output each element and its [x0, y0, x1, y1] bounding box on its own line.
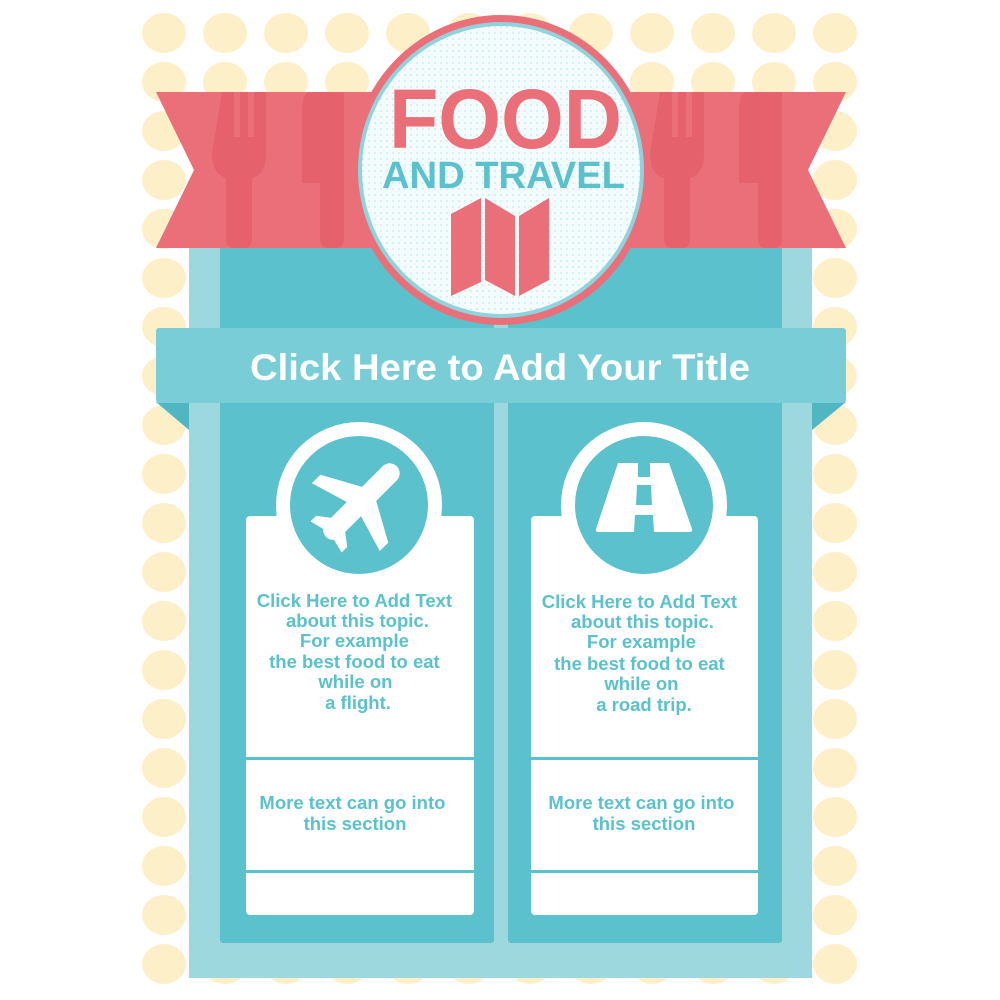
text block: For example — [587, 631, 696, 652]
icon: fork and knife left — [212, 92, 344, 248]
heading: FOOD: FOOD — [389, 72, 622, 166]
card: road trip — [531, 422, 758, 915]
emblem circle — [351, 15, 651, 325]
ribbon — [156, 92, 846, 248]
title band folds — [156, 402, 846, 430]
text block: while on — [603, 673, 678, 694]
text block: a flight. — [325, 692, 391, 713]
text block: more: this section — [593, 813, 695, 834]
text block: For example — [300, 630, 409, 651]
text block: about this topic. — [286, 610, 429, 631]
text block: more: More text can go into — [259, 792, 445, 813]
background panel — [189, 240, 812, 978]
text block: about this topic. — [571, 611, 714, 632]
text block: the best food to eat — [554, 653, 725, 674]
text block: the best food to eat — [269, 651, 440, 672]
text block: Click Here to Add Text — [257, 590, 452, 611]
text block: while on — [317, 671, 392, 692]
text block: more: More text can go into — [548, 792, 734, 813]
title band: Click Here to Add Your Title — [250, 347, 750, 388]
title band — [156, 328, 846, 403]
text block: Click Here to Add Text — [542, 591, 737, 612]
heading: AND TRAVEL: AND TRAVEL — [382, 155, 625, 197]
icon: map — [451, 198, 549, 296]
text block: a road trip. — [596, 694, 692, 715]
text block: more: this section — [304, 813, 406, 834]
icon: fork and knife right — [650, 92, 782, 248]
icon: airplane — [292, 432, 431, 571]
card: flight — [246, 422, 474, 915]
icon: road — [596, 463, 692, 532]
